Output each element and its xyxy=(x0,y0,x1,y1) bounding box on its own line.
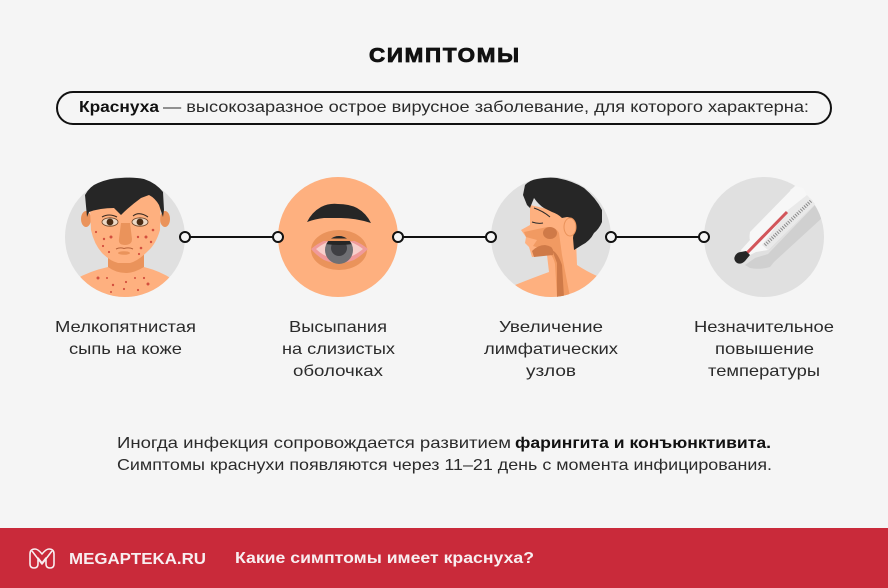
label: temperature: Незначительное xyxy=(694,319,834,336)
label: lymph nodes: лимфатических xyxy=(484,341,618,358)
title: СИМПТОМЫ xyxy=(369,45,519,67)
label: rash xyxy=(55,319,196,358)
label: rash: сыпь на коже xyxy=(69,341,182,358)
intro pill: Краснуха xyxy=(79,99,159,116)
connector: mucosa to lymph nodes xyxy=(398,236,491,238)
icon: eye with red conjunctiva xyxy=(278,177,398,297)
label: temperature: повышение xyxy=(715,341,814,358)
label: rash: Мелкопятнистая xyxy=(55,319,196,336)
footer question: Какие симптомы имеет краснуха? xyxy=(235,550,534,567)
footer band xyxy=(0,528,888,588)
icon: face with rash xyxy=(65,177,185,300)
brand name: MEGAPTEKA.RU xyxy=(69,551,206,568)
node: circle 3 right xyxy=(606,232,616,242)
connector: lymph nodes to temperature xyxy=(611,236,704,238)
label: lymph nodes: Увеличение xyxy=(499,319,603,336)
node: circle 1 right xyxy=(180,232,190,242)
label: mucosa xyxy=(282,319,395,380)
note text: Симптомы краснухи появляются через 11–21 день с момента инфицирования. xyxy=(117,457,772,474)
label: temperature xyxy=(694,319,834,380)
label: mucosa: Высыпания xyxy=(289,319,387,336)
label: mucosa: оболочках xyxy=(293,363,383,380)
label: mucosa: на слизистых xyxy=(282,341,395,358)
connector: rash to mucosa xyxy=(185,236,278,238)
intro pill xyxy=(57,92,831,124)
icon: logo xyxy=(30,549,54,568)
note text xyxy=(117,435,772,474)
intro pill: — высокозаразное острое вирусное заболевание, для которого характерна: xyxy=(163,99,809,116)
node: circle 3 left xyxy=(486,232,496,242)
label: temperature: температуры xyxy=(708,363,820,380)
icon: thermometer xyxy=(704,177,824,297)
label: lymph nodes xyxy=(484,319,618,380)
node: circle 2 right xyxy=(393,232,403,242)
node: circle 2 left xyxy=(273,232,283,242)
note text: фарингита и конъюнктивита. xyxy=(515,435,771,452)
icon: head profile with throat xyxy=(491,177,615,300)
note text: Иногда инфекция сопровождается развитием xyxy=(117,435,511,452)
node: circle 4 left xyxy=(699,232,709,242)
label: lymph nodes: узлов xyxy=(526,363,576,380)
